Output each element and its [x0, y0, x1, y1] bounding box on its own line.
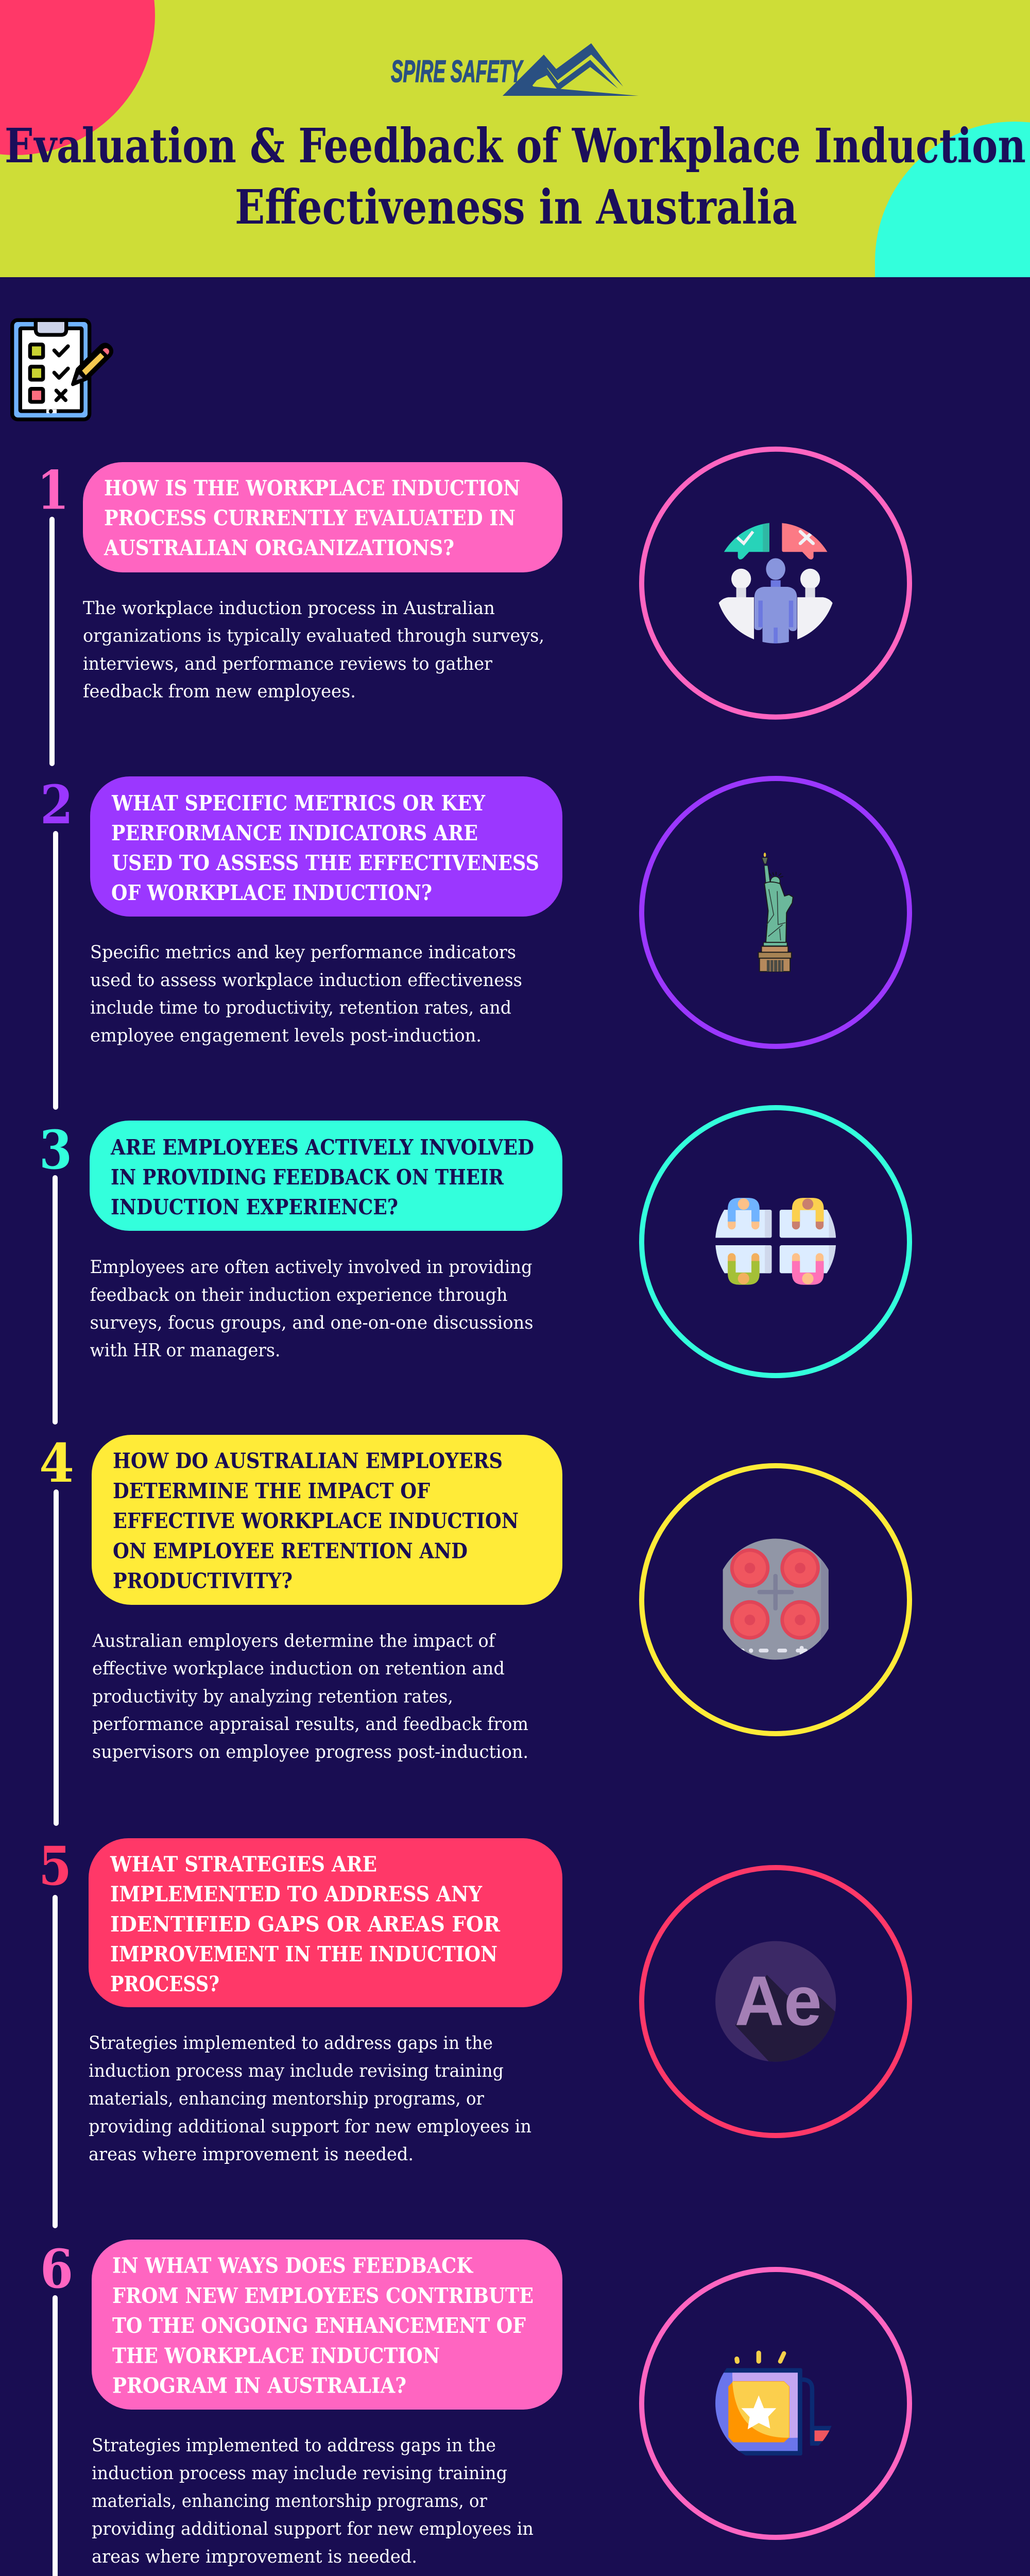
number 1: 1 — [37, 460, 69, 521]
icon: people with yes and no speech bubbles — [719, 523, 833, 643]
answer text 1: feedback from new employees. — [83, 681, 356, 702]
question pill 4: HOW DO AUSTRALIAN EMPLOYERS — [113, 1449, 503, 1473]
answer text 4: Australian employers determine the impact of — [92, 1631, 496, 1652]
question pill 3: INDUCTION EXPERIENCE? — [111, 1195, 398, 1219]
question pill 6: TO THE ONGOING ENHANCEMENT OF — [112, 2313, 526, 2338]
question pill 1: AUSTRALIAN ORGANIZATIONS? — [104, 536, 454, 561]
question pill 1: HOW IS THE WORKPLACE INDUCTION — [104, 476, 520, 501]
number 5: 5 — [39, 1835, 72, 1897]
question pill 6 — [92, 2240, 562, 2410]
answer text 3: surveys, focus groups, and one-on-one discussions — [90, 1313, 534, 1333]
timeline rod 2 — [53, 831, 58, 1110]
number 3: 3 — [39, 1119, 72, 1181]
icon ring 4 — [642, 1466, 909, 1734]
timeline rod 1 — [49, 517, 55, 766]
answer text 5: Strategies implemented to address gaps in the — [89, 2033, 493, 2054]
question pill 2: PERFORMANCE INDICATORS ARE — [111, 821, 478, 845]
question pill 4: EFFECTIVE WORKPLACE INDUCTION — [113, 1509, 519, 1533]
answer text 1: The workplace induction process in Australian — [83, 598, 495, 619]
icon ring 3 — [642, 1108, 909, 1376]
answer text 6 — [92, 2435, 534, 2567]
question pill 2: USED TO ASSESS THE EFFECTIVENESS — [112, 851, 539, 875]
question pill 4: PRODUCTIVITY? — [113, 1568, 293, 1593]
answer text 5 — [89, 2033, 531, 2165]
question pill 6: THE WORKPLACE INDUCTION — [112, 2343, 440, 2368]
answer text 1: organizations is typically evaluated through surveys, — [83, 625, 544, 646]
answer text 2: include time to productivity, retention rates, and — [90, 997, 511, 1018]
question pill 5: PROCESS? — [110, 1972, 219, 1996]
question pill 5: IDENTIFIED GAPS OR AREAS FOR — [110, 1912, 501, 1937]
question pill 6: IN WHAT WAYS DOES FEEDBACK — [112, 2253, 473, 2278]
answer text 3: with HR or managers. — [90, 1341, 280, 1361]
answer text 4: performance appraisal results, and feedback from — [92, 1714, 528, 1735]
answer text 3 — [90, 1257, 534, 1361]
question pill 1 — [83, 462, 562, 572]
icon: mug with star — [713, 2353, 836, 2455]
panel: question 3 — [39, 1108, 909, 1425]
panel: question 4 — [39, 1432, 909, 1826]
answer text 6: providing additional support for new employees in — [92, 2519, 534, 2539]
icon: clipboard checklist with pencil — [12, 320, 112, 419]
answer text 2 — [90, 942, 522, 1046]
icon ring 5 — [642, 1868, 909, 2136]
title — [5, 118, 1026, 235]
question pill 2: WHAT SPECIFIC METRICS OR KEY — [111, 791, 486, 816]
icon: statue of liberty — [758, 853, 793, 972]
answer text 6: Strategies implemented to address gaps in the — [92, 2435, 496, 2456]
number 2: 2 — [40, 774, 73, 836]
answer text 1: interviews, and performance reviews to gather — [83, 654, 492, 674]
panel: question 2 — [40, 774, 909, 1110]
answer text 5: areas where improvement is needed. — [89, 2144, 414, 2165]
panel: question 5 — [39, 1835, 909, 2228]
icon: After Effects badge — [715, 1941, 837, 2064]
answer text 6: areas where improvement is needed. — [92, 2547, 417, 2567]
answer text 4: productivity by analyzing retention rates, — [92, 1687, 453, 1707]
header logo: SPIRE SAFETY — [391, 54, 524, 89]
icon: After Effects badge: Ae — [735, 1961, 822, 2040]
icon ring 6 — [642, 2269, 909, 2537]
icon ring 1 — [642, 449, 909, 717]
answer text 4: effective workplace induction on retention and — [92, 1658, 505, 1679]
answer text 2: employee engagement levels post-induction. — [90, 1025, 482, 1046]
timeline rod 6 — [53, 2295, 58, 2576]
question pill 3: IN PROVIDING FEEDBACK ON THEIR — [111, 1165, 504, 1190]
answer text 3: Employees are often actively involved in providing — [90, 1257, 533, 1278]
panel: question 6 — [40, 2238, 909, 2576]
answer text 4: supervisors on employee progress post-induction. — [92, 1742, 528, 1762]
answer text 4 — [92, 1631, 528, 1762]
header logo — [391, 43, 639, 96]
question pill 5: IMPROVEMENT IN THE INDUCTION — [110, 1942, 497, 1967]
answer text 5: materials, enhancing mentorship programs, or — [89, 2089, 484, 2109]
question pill 5: IMPLEMENTED TO ADDRESS ANY — [110, 1882, 483, 1906]
number 4: 4 — [39, 1432, 74, 1495]
question pill 2 — [90, 776, 562, 917]
timeline rod 5 — [53, 1895, 58, 2228]
answer text 6: materials, enhancing mentorship programs, or — [92, 2491, 487, 2512]
title: Effectiveness in Australia — [235, 179, 797, 235]
answer text 3: feedback on their induction experience through — [90, 1285, 508, 1306]
question pill 4 — [92, 1435, 562, 1605]
answer text 5: providing additional support for new employees in — [89, 2116, 531, 2137]
question pill 1: PROCESS CURRENTLY EVALUATED IN — [104, 506, 516, 531]
icon: cooktop with four red burners — [723, 1535, 829, 1663]
icon ring 2 — [642, 778, 909, 1046]
answer text 1 — [83, 598, 544, 702]
timeline rod 4 — [54, 1489, 59, 1826]
question pill 5: WHAT STRATEGIES ARE — [110, 1852, 377, 1876]
answer text 2: used to assess workplace induction effectiveness — [90, 970, 522, 991]
question pill 3 — [90, 1121, 562, 1231]
answer text 5: induction process may include revising training — [89, 2061, 504, 2081]
question pill 2: OF WORKPLACE INDUCTION? — [111, 880, 432, 905]
question pill 5 — [89, 1838, 562, 2007]
panel: question 1 — [37, 449, 909, 766]
timeline rod 3 — [53, 1175, 58, 1425]
question pill 6: PROGRAM IN AUSTRALIA? — [112, 2373, 406, 2398]
answer text 2: Specific metrics and key performance indicators — [90, 942, 516, 963]
question pill 3: ARE EMPLOYEES ACTIVELY INVOLVED — [110, 1135, 534, 1160]
question pill 6: FROM NEW EMPLOYEES CONTRIBUTE — [112, 2283, 534, 2308]
answer text 6: induction process may include revising training — [92, 2463, 507, 2484]
header band — [0, 0, 1030, 277]
number 6: 6 — [40, 2238, 73, 2300]
question pill 4: ON EMPLOYEE RETENTION AND — [113, 1538, 468, 1563]
question pill 4: DETERMINE THE IMPACT OF — [113, 1479, 430, 1503]
icon: four people around desks seen from above — [713, 1198, 839, 1285]
